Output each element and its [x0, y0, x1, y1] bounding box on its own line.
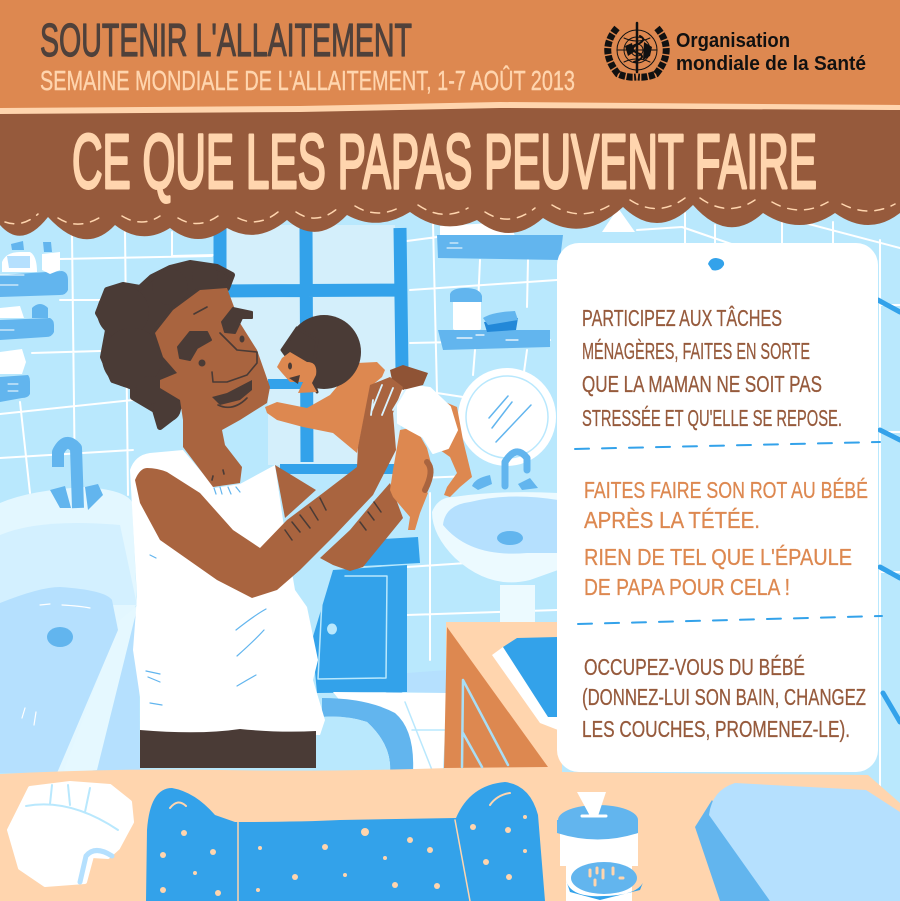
nose and eyes	[194, 307, 257, 480]
orange cabinet and blue pad	[444, 622, 562, 774]
wipes box	[557, 792, 644, 901]
cushion	[695, 783, 900, 901]
advice: chores: PARTICIPEZ AUX TÂCHES	[582, 305, 782, 331]
heading: SOUTENIR L'ALLAITEMENT	[40, 14, 412, 66]
advice: burping	[584, 477, 868, 600]
shirt folds	[146, 487, 266, 705]
advice: baby care	[582, 654, 866, 742]
near arm	[135, 377, 403, 598]
advice: burping: RIEN DE TEL QUE L'ÉPAULE	[584, 544, 852, 570]
organisation name: mondiale de la Santé	[676, 53, 866, 75]
face and neck	[155, 288, 270, 487]
subheading: SEMAINE MONDIALE DE L'ALLAITEMENT, 1-7 AOÛT 2013	[40, 65, 575, 96]
left shelves with bottles	[0, 241, 68, 402]
text panel	[557, 243, 882, 772]
hair	[97, 263, 232, 427]
front table	[0, 768, 900, 901]
cabinet	[312, 537, 420, 702]
faucet and sink	[432, 452, 558, 622]
mirror	[458, 368, 556, 466]
baby face	[277, 352, 317, 393]
advice: burping: DE PAPA POUR CELA !	[584, 574, 790, 600]
bathtub	[0, 443, 140, 773]
baby body	[265, 362, 385, 453]
eyebrows	[178, 308, 252, 360]
WHO logo	[608, 23, 866, 77]
divider	[575, 442, 880, 449]
advice: baby care: OCCUPEZ-VOUS DU BÉBÉ	[584, 654, 805, 680]
pin	[708, 258, 724, 270]
far forearm	[320, 483, 403, 571]
father and baby	[97, 263, 472, 768]
advice: chores	[582, 305, 842, 431]
trousers	[140, 729, 316, 768]
advice: chores: QUE LA MAMAN NE SOIT PAS	[582, 371, 822, 397]
baby legs	[390, 402, 472, 530]
top right shelf	[437, 208, 635, 260]
organisation name: Organisation	[676, 30, 790, 52]
advice: burping: APRÈS LA TÉTÉE.	[584, 507, 760, 533]
toilet and floor	[322, 670, 447, 772]
window	[220, 225, 402, 469]
shirt	[130, 450, 325, 735]
lower shelf with jar and bowl	[438, 288, 550, 350]
right wall stripes	[878, 300, 900, 722]
icon: WHO emblem	[608, 23, 666, 77]
divider	[578, 616, 882, 624]
diaper	[398, 385, 457, 453]
blue changing mat	[146, 782, 545, 901]
far hand	[390, 365, 428, 390]
diaper on table	[9, 783, 132, 885]
bathroom background	[0, 200, 900, 901]
shoulder	[275, 465, 316, 518]
organisation name	[676, 30, 866, 75]
brown valance with scallops	[0, 105, 900, 239]
leg shadow	[425, 462, 431, 490]
top orange header band	[0, 0, 900, 108]
mouth	[212, 380, 252, 405]
arm marks	[285, 498, 381, 540]
cream stripe	[0, 102, 900, 114]
baby hair	[282, 315, 361, 392]
